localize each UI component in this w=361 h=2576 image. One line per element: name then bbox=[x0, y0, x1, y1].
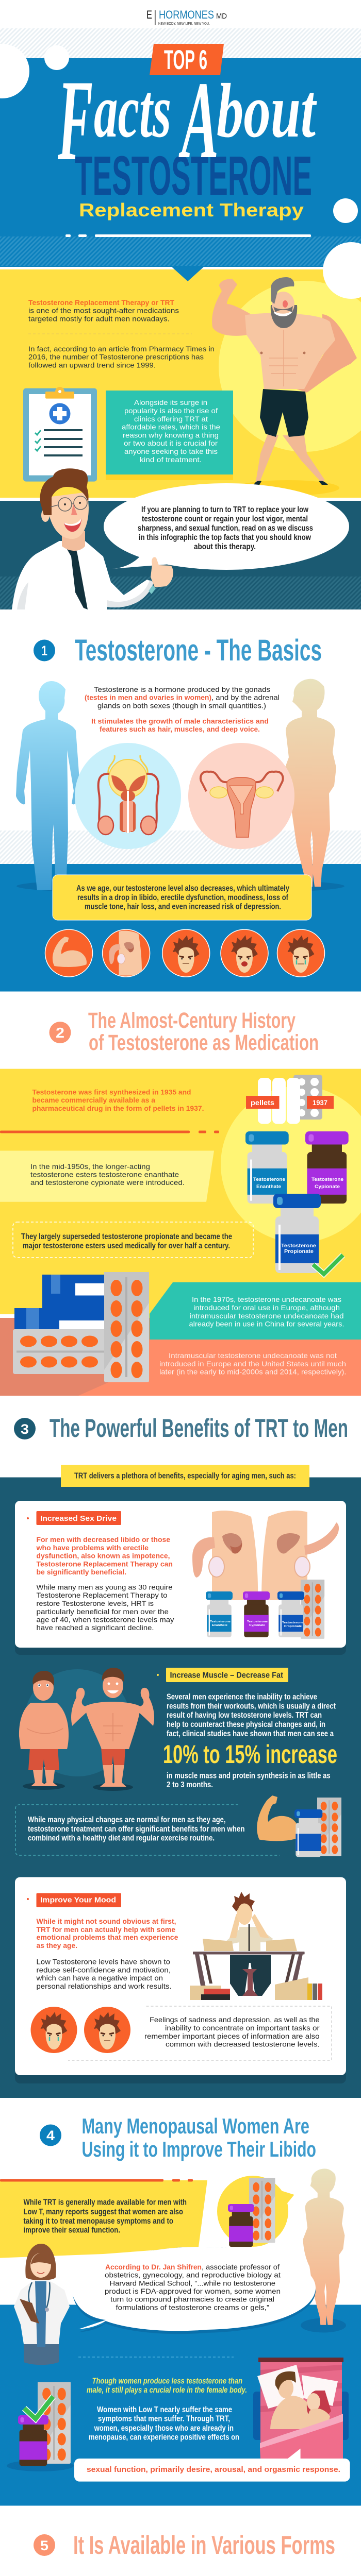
text: men over 40: particularly beneficial for men over the bbox=[36, 1607, 169, 1616]
callout: surge in popularity: clinics offering TRT at bbox=[134, 415, 208, 423]
title: facts about: A bbox=[178, 58, 219, 181]
text: pharmacy times trend: followed an upward trend since 1999. bbox=[28, 361, 156, 369]
callout: concentration: Feelings of sadness and depression, as well as the bbox=[150, 2015, 320, 2024]
callout: concentration bbox=[68, 2006, 332, 2060]
callout: concentration: common with decreased testosterone levels. bbox=[166, 2040, 320, 2048]
illustration: male anatomy and medication: Propionate bbox=[284, 1625, 302, 1628]
text: self-confidence bbox=[36, 1958, 171, 1990]
illustration: muscular bearded man bbox=[212, 277, 357, 485]
text: female testosterone role: women, especially those who are already in bbox=[94, 2424, 234, 2433]
illustration: male anatomy and medication: Testosterone bbox=[247, 1620, 268, 1623]
speech bubble: Dr. Shifren: turn to compound pharmacies to create original bbox=[110, 2295, 274, 2303]
banner: benefits intro: TRT delivers a plethora of benefits, especially for aging men, such as: bbox=[74, 1471, 296, 1480]
callout: superseded propionate bbox=[13, 1222, 253, 1258]
illustration: doctor thumbs up bbox=[12, 468, 173, 609]
text: pharmacy times trend: 2016, the number of Testosterone prescriptions has bbox=[28, 353, 204, 361]
callout: concentration: inability to concentrate on important tasks or bbox=[165, 2024, 320, 2032]
callout: surge in popularity: Alongside its surge in bbox=[134, 398, 207, 406]
callout: surge in popularity: or two about it is crucial for bbox=[124, 439, 218, 447]
callout: diet and exercise: combined with a healthy diet and regular exercise routine. bbox=[28, 1834, 215, 1843]
hero banner bbox=[0, 28, 361, 267]
speech bubble bbox=[104, 483, 349, 570]
illustration: male anatomy and medication: Testosterone bbox=[282, 1621, 303, 1624]
callout: surge in popularity bbox=[106, 391, 233, 480]
icon: crying face bbox=[31, 2007, 77, 2053]
callout: sexual function: sexual function, primarily desire, arousal, and orgasmic response. bbox=[87, 2465, 340, 2474]
callout: diet and exercise: While many physical changes are normal for men as they age, bbox=[28, 1816, 226, 1824]
callout: mid-1950s bbox=[0, 1151, 214, 1202]
text: workouts: result of having low testosterone levels. TRT can bbox=[167, 1711, 322, 1720]
callout: diet and exercise: testosterone treatment can offer significant benefits for men when bbox=[28, 1825, 244, 1834]
top 6 badge: TOP 6 bbox=[164, 45, 207, 75]
text: men over 40: age of 40, when testosterone levels may bbox=[36, 1616, 174, 1624]
heading: section 5: 5 bbox=[40, 2538, 48, 2553]
speech bubble: If you are planning to turn to TRT to replace your low bbox=[141, 505, 308, 514]
text: emotional problems: emotional problems that men experience bbox=[36, 1933, 178, 1941]
salmon strip bbox=[0, 1318, 361, 1396]
text: self-confidence: reduce self-confidence and motivation, bbox=[36, 1966, 171, 1974]
text: emotional problems bbox=[36, 1917, 178, 1950]
text: impotence bbox=[36, 1535, 173, 1576]
illustration: three ester bottles: Testosterone bbox=[281, 1243, 316, 1249]
title: replacement therapy: Replacement Therapy bbox=[79, 199, 304, 221]
callout: surge in popularity: reason why knowing a thing bbox=[123, 431, 219, 439]
callout: surge in popularity: affordable rates, which is the bbox=[122, 422, 220, 431]
icon: loss of muscle bbox=[45, 929, 93, 977]
speech bubble: about this therapy. bbox=[194, 543, 256, 551]
text: intramuscular later bbox=[159, 1351, 347, 1376]
illustration: male anatomy and medication bbox=[192, 1511, 339, 1639]
title: facts about bbox=[58, 56, 317, 184]
text: impotence: Testosterone Replacement Therapy can bbox=[36, 1560, 173, 1568]
label: increase muscle: Increase Muscle – Decrease Fat bbox=[170, 1671, 284, 1680]
text: men over 40: have reached a significant decline. bbox=[36, 1623, 154, 1632]
speech bubble: Dr. Shifren: product is FDA-approved for women, some women bbox=[105, 2287, 281, 2295]
callout: diet and exercise bbox=[15, 1805, 280, 1855]
text: first synthesized bbox=[32, 1088, 204, 1112]
text: TRT intro: targeted mostly for adult men nowadays. bbox=[28, 314, 170, 323]
text: low t reports: taking it to treat menopause symptoms and to bbox=[24, 2217, 173, 2226]
icon: medication bubble bbox=[217, 2176, 294, 2247]
illustration: before and after body bbox=[19, 1668, 154, 1791]
text: intramuscular later: introduced in Europe and the United States until much bbox=[159, 1360, 346, 1368]
text: pharmacy times trend bbox=[28, 345, 215, 369]
title: facts about: F bbox=[58, 56, 93, 184]
panel: benefits bbox=[0, 1465, 361, 2098]
icon: clipboard bbox=[23, 387, 97, 482]
illustration: three ester bottles: Cypionate bbox=[315, 1184, 340, 1190]
text: TRT intro bbox=[28, 298, 179, 323]
callout: sexual function bbox=[74, 2449, 350, 2482]
illustration: arm and medication bbox=[257, 1795, 341, 1857]
text: muscle mass: 2 to 3 months. bbox=[167, 1781, 213, 1789]
label bbox=[36, 1511, 121, 1525]
text: TRT intro: Testosterone Replacement Therapy or TRT bbox=[28, 298, 174, 307]
heading: section 1: 1 bbox=[41, 643, 47, 658]
illustration: medication with check bbox=[7, 2382, 74, 2471]
speech bubble: Dr. Shifren: obstetrics, gynecology, and reproductive biology at bbox=[105, 2270, 281, 2279]
header logo: NEW BODY. NEW LIFE. NEW YOU. bbox=[158, 22, 210, 26]
text: workouts bbox=[167, 1693, 336, 1738]
text: first synthesized: pharmaceutical drug in the form of pellets in 1937. bbox=[32, 1104, 204, 1112]
text: 1970s undecanoate bbox=[189, 1295, 344, 1328]
text: what testosterone is: Testosterone is a hormone produced by the gonads bbox=[94, 685, 270, 693]
illustration: three ester bottles bbox=[245, 1131, 349, 1274]
icon: moodiness bbox=[221, 929, 268, 977]
illustration: female silhouette bbox=[283, 679, 336, 887]
illustration: pellets: 1937 bbox=[313, 1098, 327, 1107]
text: 1970s undecanoate: In the 1970s, testosterone undecanoate was bbox=[192, 1295, 341, 1303]
panel: menopausal women bbox=[0, 2168, 361, 2506]
callout: superseded propionate: major testosterone esters used medically for over half a century. bbox=[23, 1242, 230, 1250]
callout: mid-1950s: testosterone esters testosterone enanthate bbox=[30, 1171, 179, 1179]
text: impotence: be significantly beneficial. bbox=[36, 1568, 126, 1576]
label: increase muscle bbox=[166, 1668, 288, 1682]
illustration: male anatomy and medication: Testosterone bbox=[210, 1620, 231, 1623]
speech bubble: Dr. Shifren: , associate professor of bbox=[202, 2263, 280, 2271]
illustration: three ester bottles: Enanthate bbox=[256, 1184, 281, 1190]
callout: mid-1950s: and testosterone cypionate were introduced. bbox=[30, 1178, 185, 1187]
illustration: female silhouette bbox=[301, 2168, 346, 2333]
text: muscle mass bbox=[167, 1772, 331, 1789]
text: what testosterone is: It stimulates the growth of male characteristics and bbox=[91, 717, 269, 725]
illustration: pill packs bbox=[13, 1272, 149, 1382]
text: intramuscular later: Intramuscular testosterone undecanoate was not bbox=[169, 1351, 337, 1360]
callout: aging effects: As we age, our testosterone level also decreases, which ultimately bbox=[76, 884, 289, 893]
illustration: couple in bed bbox=[253, 2358, 349, 2459]
header logo: MD bbox=[216, 12, 227, 21]
callout: superseded propionate: They largely superseded testosterone propionate and became the bbox=[21, 1232, 232, 1241]
text: female testosterone role bbox=[87, 2377, 247, 2442]
text: 1970s undecanoate: intramuscular testosterone undecanoate had bbox=[190, 1312, 343, 1320]
label: Improve Your Mood bbox=[40, 1896, 116, 1905]
text: impotence: dysfunction, also known as impotence, bbox=[36, 1552, 170, 1560]
speech bubble: Dr. Shifren: Harvard Medical School, “...while no testosterone bbox=[109, 2279, 275, 2287]
text: low t reports: Low T, many reports suggest that women are also bbox=[24, 2208, 183, 2216]
text: first synthesized: became commercially available as a bbox=[32, 1096, 155, 1104]
text: men over 40: restore Testosterone levels, HRT is bbox=[36, 1599, 154, 1607]
header logo bbox=[146, 8, 227, 26]
title: facts about: acts bbox=[94, 68, 171, 154]
illustration: male reproductive system bbox=[75, 743, 181, 849]
callout: aging effects bbox=[53, 875, 311, 920]
text: men over 40: Testosterone Replacement Therapy to bbox=[36, 1591, 168, 1599]
illustration: male silhouette bbox=[16, 681, 80, 890]
illustration: three ester bottles: Testosterone bbox=[253, 1177, 285, 1182]
text: men over 40 bbox=[36, 1583, 174, 1632]
panel: intro yellow bbox=[0, 242, 361, 498]
text: self-confidence: personal relationships and work results. bbox=[36, 1982, 171, 1990]
callout: mid-1950s: In the mid-1950s, the longer-acting bbox=[30, 1162, 150, 1171]
text: impotence: For men with decreased libido or those bbox=[36, 1535, 170, 1544]
speech bubble: in this infographic the top facts that you should know bbox=[139, 533, 311, 542]
icon: erectile dysfunction bbox=[103, 929, 150, 977]
heading: section 2 bbox=[50, 1008, 319, 1055]
text: female testosterone role: symptoms that men suffer. Through TRT, bbox=[98, 2415, 230, 2424]
floor shadow bbox=[236, 480, 339, 496]
text: what testosterone is: features such as hair, muscles, and deep voice. bbox=[100, 725, 260, 733]
callout: concentration: remember important pieces of information are also bbox=[144, 2032, 320, 2040]
icon: depression bbox=[277, 929, 325, 977]
heading: section 4: 4 bbox=[46, 2128, 55, 2143]
panel: teal intro band bbox=[0, 468, 361, 609]
icon: sad face bbox=[84, 2007, 130, 2053]
text: intramuscular later: later (in the early to mid-2000s and 2014, respectively). bbox=[159, 1367, 347, 1376]
text: self-confidence: Low Testosterone levels have shown to bbox=[36, 1958, 170, 1966]
label: Increased Sex Drive bbox=[40, 1514, 117, 1523]
illustration: male anatomy and medication: Cypionate bbox=[249, 1624, 265, 1627]
illustration: female reproductive system bbox=[188, 743, 294, 849]
speech bubble: Dr. Shifren bbox=[71, 2247, 316, 2334]
text: 1970s undecanoate: already been in use in China for several years. bbox=[189, 1320, 344, 1328]
speech bubble: sharpness, and sexual function, read on as we discuss bbox=[138, 524, 313, 533]
text: low t reports: improve their sexual function. bbox=[24, 2226, 120, 2235]
header logo: HORMONES bbox=[159, 8, 214, 21]
card: increased sex drive bbox=[15, 1501, 346, 1655]
illustration: male anatomy and medication: Enanthate bbox=[212, 1624, 227, 1627]
text: workouts: Several men experience the inability to achieve bbox=[167, 1693, 317, 1702]
text: 1970s undecanoate: introduced for oral use in Europe, although bbox=[193, 1303, 340, 1312]
text: low t reports: While TRT is generally made available for men with bbox=[24, 2198, 187, 2207]
text: emotional problems: as they age. bbox=[36, 1941, 77, 1950]
banner: benefits intro bbox=[61, 1465, 309, 1487]
header logo: E bbox=[146, 8, 152, 21]
text: impotence: who have problems with erectile bbox=[36, 1544, 149, 1552]
panel: history bbox=[0, 1069, 361, 1396]
speech bubble: Dr. Shifren: formulations of testosterone creams or gels,” bbox=[116, 2303, 269, 2312]
text: pharmacy times trend: In fact, according to an article from Pharmacy Times in bbox=[28, 345, 215, 353]
top 6 badge bbox=[150, 44, 224, 75]
text: first synthesized: Testosterone was first synthesized in 1935 and bbox=[32, 1088, 191, 1096]
icon: hair loss bbox=[162, 929, 210, 977]
title: facts about: bout bbox=[217, 68, 317, 154]
illustration: three ester bottles: Testosterone bbox=[311, 1177, 343, 1182]
text: what testosterone is: , and by the adrenal bbox=[211, 693, 280, 702]
text: self-confidence: which can have a negative impact on bbox=[36, 1974, 163, 1982]
callout: surge in popularity: anyone seeking to take this bbox=[124, 447, 218, 455]
text: female testosterone role: male, it still plays a crucial role in the female body. bbox=[87, 2386, 247, 2395]
callout: aging effects: results in a drop in libido, erectile dysfunction, moodiness, loss of bbox=[77, 893, 289, 902]
heading: section 2: 2 bbox=[56, 1025, 64, 1041]
text: emotional problems: TRT for men can actually help with some bbox=[36, 1925, 175, 1934]
illustration: pellets bbox=[246, 1075, 334, 1124]
illustration: pellets: pellets bbox=[251, 1098, 274, 1107]
callout: surge in popularity: popularity is also the rise of bbox=[124, 406, 218, 415]
speech bubble: testosterone count or regain your lost vigor, mental bbox=[142, 515, 308, 523]
heading: section 4 bbox=[40, 2114, 316, 2161]
panel: basics background bbox=[0, 831, 361, 991]
text: female testosterone role: Women with Low T nearly suffer the same bbox=[97, 2405, 232, 2414]
text: female testosterone role: menopause, can experience positive effects on bbox=[89, 2433, 239, 2442]
text: what testosterone is: glands on both sexes (though in small quantities.) bbox=[97, 702, 266, 710]
label bbox=[36, 1893, 121, 1907]
text: female testosterone role: Though women produce less testosterone than bbox=[92, 2377, 242, 2385]
callout: aging effects: muscle tone, hair loss, and even increased risk of depression. bbox=[85, 903, 281, 911]
text: what testosterone is bbox=[85, 685, 280, 733]
text: what testosterone is: (testes in men and ovaries in women) bbox=[85, 693, 211, 702]
heading: section 3: 3 bbox=[21, 1421, 29, 1437]
card: improve mood bbox=[15, 1877, 346, 2083]
text: TRT intro: is one of the most sought-after medications bbox=[28, 306, 179, 314]
illustration: stressed man at desk bbox=[190, 1892, 322, 2000]
text: men over 40: While many men as young as 30 require bbox=[36, 1583, 173, 1591]
callout: surge in popularity: kind of treatment. bbox=[140, 455, 202, 464]
illustration: three ester bottles: Propionate bbox=[284, 1248, 314, 1255]
teal strip bbox=[150, 1282, 361, 1340]
speech bubble: Dr. Shifren: According to Dr. Jan Shifren bbox=[105, 2263, 202, 2271]
text: emotional problems: While it might not sound obvious at first, bbox=[36, 1917, 176, 1925]
illustration: woman doctor bbox=[14, 2244, 70, 2365]
text: workouts: help to counteract these physical changes and, in bbox=[167, 1720, 325, 1729]
text: low t reports bbox=[24, 2198, 187, 2235]
